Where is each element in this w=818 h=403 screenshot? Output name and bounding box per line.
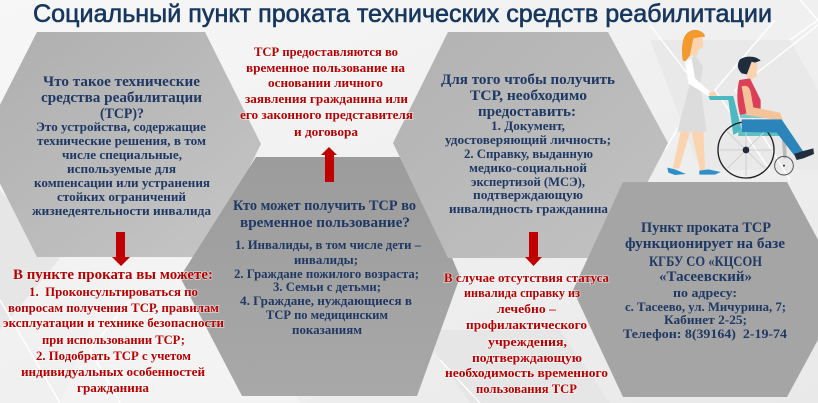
text: address and phone: по адресу: [673, 286, 737, 300]
callout: what you can do: эксплуатации и технике безопасности [3, 315, 225, 330]
list: eligible groups: 1. Инвалиды, в том числе дети – [235, 238, 422, 252]
panel: documents required [393, 32, 668, 258]
heading: who can receive: временное пользование? [240, 215, 410, 231]
callout: what you can do: В пункте проката вы можете: [13, 267, 213, 283]
text: TSR definition: стойких ограничений [57, 190, 186, 204]
list: eligible groups: 4. Граждане, нуждающиеся в [240, 294, 412, 308]
heading: rental point: КГБУ СО «КЦСОН [649, 254, 763, 270]
title: Социальный пункт проката технических средств реабилитации [33, 0, 772, 28]
callout: what you can do: 1. Проконсультироваться по [29, 284, 198, 299]
list: documents: подтверждающую [473, 188, 583, 202]
callout: no disability status: пользования ТСР [476, 381, 577, 396]
heading: rental point [625, 220, 786, 285]
arrow: down to options [112, 232, 130, 266]
patient [737, 57, 814, 160]
text: address and phone [623, 286, 788, 341]
callout: what you can do: вопросам получения ТСР, правилам [8, 300, 219, 315]
text: TSR definition: жизнедеятельности инвалида [32, 204, 212, 218]
text: TSR definition [32, 120, 212, 218]
heading: documents required: ТСР, необходимо [470, 88, 587, 104]
heading: documents required: предоставить: [478, 104, 576, 120]
callout: what you can do: 2. Подобрать ТСР с учетом [36, 348, 191, 363]
text: TSR definition: компенсации или устранения [34, 176, 210, 190]
arrow: up to terms [321, 147, 337, 182]
arrow: down to no-status note [525, 232, 542, 266]
callout: temporary use terms: ТСР предоставляются во [254, 44, 398, 59]
text: address and phone: Телефон: 8(39164) 2-19-74 [623, 327, 788, 341]
heading: what is TSR: Что такое технические [43, 74, 201, 90]
callout: temporary use terms: заявления гражданина или [245, 91, 409, 106]
list: documents: инвалидность гражданина [449, 202, 609, 216]
callout: what you can do: индивидуальных особенностей [21, 364, 206, 379]
text: address and phone: с. Тасеево, ул. Мичурина, 7; [625, 300, 786, 314]
heading: what is TSR: средства реабилитации [41, 90, 202, 106]
list: documents: 1. Документ, [491, 119, 565, 133]
heading: documents required: Для того чтобы получить [441, 72, 615, 88]
nurse [667, 30, 721, 175]
panel: who can receive [180, 157, 460, 396]
callout: no disability status: лечебно – [497, 301, 557, 316]
heading: rental point: Пункт проката ТСР [641, 220, 771, 236]
panel: what is TSR [0, 32, 261, 257]
callout: no disability status: профилактического [466, 317, 587, 332]
callout: temporary use terms: и договора [294, 124, 359, 139]
callout: no disability status: подтверждающую [472, 350, 582, 365]
list: documents: экспертизой (МСЭ), [471, 175, 585, 189]
callout: what you can do: при использовании ТСР; [42, 332, 185, 347]
panel: rental point address [573, 182, 818, 397]
callout: temporary use terms: временное пользование на [246, 60, 406, 75]
list: eligible groups: показаниям [292, 323, 363, 337]
list: eligible groups: 2. Граждане пожилого возраста; [234, 267, 419, 281]
list: documents: медико-социальной [469, 161, 587, 175]
list: documents: удостоверяющий личность; [445, 133, 611, 147]
list: documents: 2. Справку, выданную [464, 147, 593, 161]
callout: temporary use terms: его законного представителя [240, 107, 413, 122]
heading: rental point: функционирует на базе [625, 236, 786, 252]
callout: temporary use terms: основании личного [268, 75, 383, 90]
callout: what you can do: гражданина [77, 380, 150, 395]
text: TSR definition: Это устройства, содержащие [36, 120, 206, 134]
list: eligible groups: 3. Семьи с детьми; [273, 280, 381, 294]
illustration: nurse pushing wheelchair [667, 30, 814, 178]
callout: no disability status: учреждения, [488, 334, 567, 349]
callout: no disability status: инвалида справку из [464, 285, 580, 300]
list: eligible groups: инвалиды; [294, 253, 358, 267]
heading: who can receive: Кто может получить ТСР во [233, 198, 416, 214]
heading: rental point: «Тасеевский» [659, 269, 752, 285]
callout: no disability status: В случае отсутствия статуса [444, 270, 609, 285]
heading: what is TSR [41, 74, 202, 122]
text: TSR definition: числе специальные, [62, 148, 182, 162]
heading: documents required [441, 72, 615, 120]
text: TSR definition: используемые для [67, 162, 176, 176]
heading: who can receive [233, 198, 416, 231]
callout: what you can do [3, 267, 225, 395]
callout: no disability status: необходимость временного [445, 365, 608, 380]
text: TSR definition: технические решения, в том [37, 134, 207, 148]
text: address and phone: Кабинет 2-25; [664, 313, 747, 327]
callout: no disability status [444, 270, 609, 396]
list: eligible groups: ТСР по медицинским [266, 308, 388, 322]
callout: temporary use terms [240, 44, 413, 139]
wheelchair [708, 96, 793, 178]
list: eligible groups [234, 238, 422, 337]
heading: what is TSR: (ТСР)? [100, 106, 144, 122]
list: documents [445, 119, 611, 216]
